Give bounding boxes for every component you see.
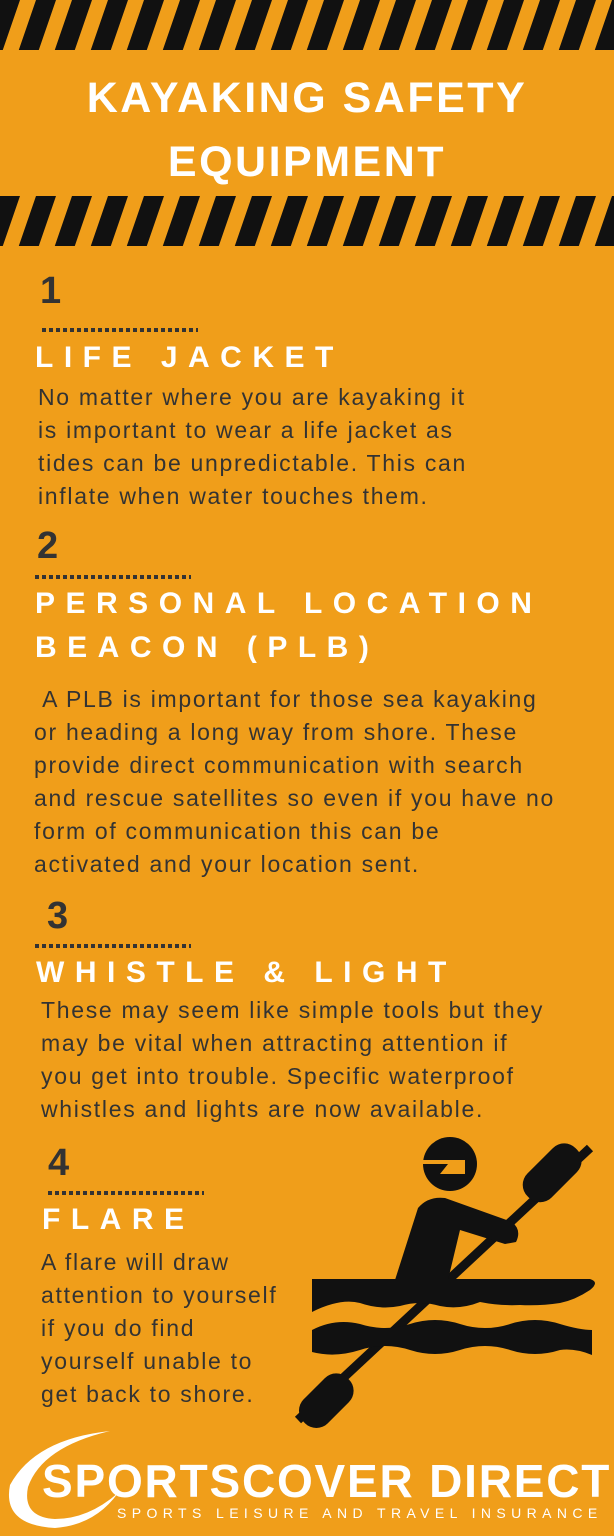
- logo: [8, 1431, 611, 1528]
- section 2: BEACON (PLB): [35, 631, 379, 664]
- section 4: get back to shore.: [41, 1381, 254, 1407]
- section 4: attention to yourself: [41, 1282, 277, 1308]
- section 1: [35, 270, 467, 509]
- tagline: SPORTS LEISURE AND TRAVEL INSURANCE: [117, 1505, 603, 1521]
- section 3: may be vital when attracting attention if: [41, 1030, 508, 1056]
- section 1: LIFE JACKET: [35, 341, 344, 374]
- title: [87, 74, 527, 186]
- section 3: [35, 895, 544, 1122]
- section 4: 4: [48, 1142, 69, 1184]
- logo swoosh: [8, 1431, 116, 1528]
- section 3: you get into trouble. Specific waterproof: [41, 1063, 515, 1089]
- section 3: 3: [47, 895, 68, 937]
- section 2: 2: [37, 525, 58, 567]
- section 1: is important to wear a life jacket as: [38, 417, 454, 443]
- section 2: activated and your location sent.: [34, 851, 420, 877]
- title: KAYAKING SAFETY: [87, 74, 527, 122]
- section 2: form of communication this can be: [34, 818, 440, 844]
- hazard stripes top: [0, 0, 614, 50]
- section 3: whistles and lights are now available.: [41, 1096, 484, 1122]
- section 2: PERSONAL LOCATION: [35, 587, 542, 620]
- section 3: WHISTLE & LIGHT: [36, 956, 457, 989]
- section 3: These may seem like simple tools but they: [41, 997, 544, 1023]
- section 4: if you do find: [41, 1315, 195, 1341]
- section 4: [41, 1142, 277, 1407]
- section 4: A flare will draw: [41, 1249, 230, 1275]
- section 2: and rescue satellites so even if you have no: [34, 785, 555, 811]
- section 1: tides can be unpredictable. This can: [38, 450, 467, 476]
- section 2: A PLB is important for those sea kayaking: [42, 686, 538, 712]
- section 2: or heading a long way from shore. These: [34, 719, 518, 745]
- section 1: No matter where you are kayaking it: [38, 384, 466, 410]
- title: EQUIPMENT: [168, 138, 446, 186]
- section 1: 1: [40, 270, 61, 312]
- section 4: FLARE: [42, 1203, 194, 1236]
- section 1: inflate when water touches them.: [38, 483, 429, 509]
- icon: kayaker: [295, 1137, 595, 1428]
- hazard stripes bottom: [0, 196, 614, 246]
- section 2: [34, 525, 555, 877]
- section 4: yourself unable to: [41, 1348, 253, 1374]
- section 2: provide direct communication with search: [34, 752, 524, 778]
- logo wordmark: SPORTSCOVER DIRECT: [42, 1455, 611, 1507]
